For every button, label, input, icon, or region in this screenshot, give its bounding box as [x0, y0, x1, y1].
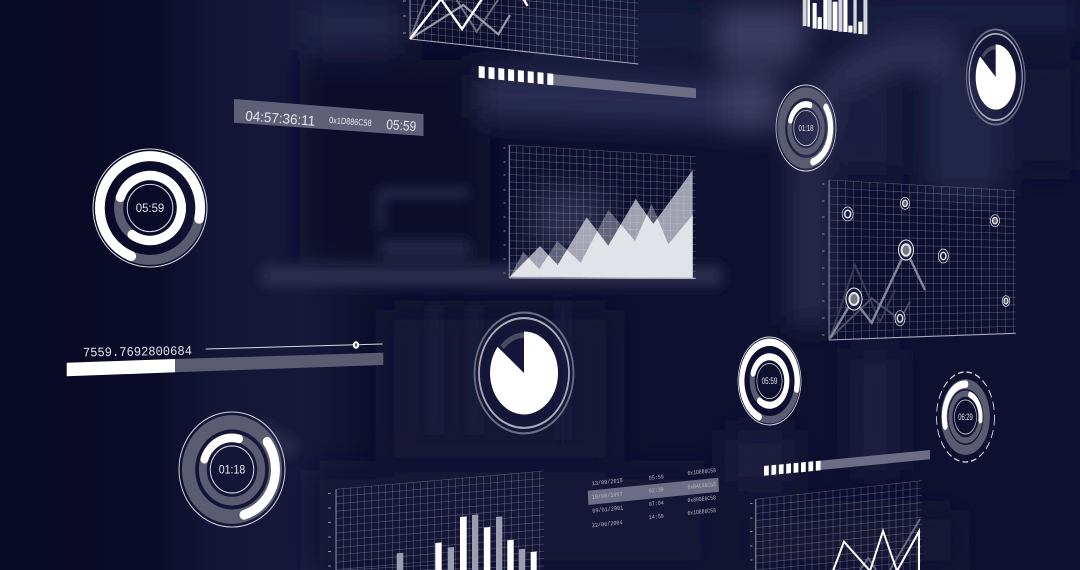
data table [588, 467, 719, 529]
data table: 0x84C46C58 [687, 481, 717, 491]
ring gauge: 06:29 with dashed outline [936, 372, 994, 462]
data table: 13/09/2015 [591, 477, 623, 487]
pie chart: centre [474, 313, 574, 433]
data table: 22/06/2004 [591, 519, 623, 529]
line chart: top centre [403, 0, 638, 64]
data table: 02:39 [648, 486, 664, 495]
ring gauge: 05:59 small [733, 331, 806, 431]
bar chart: top right strip [803, 0, 867, 34]
line chart: bottom right [750, 481, 922, 570]
ring gauge: 01:18 large: 01:18 [219, 464, 245, 477]
ring gauge: 01:18 small [772, 79, 840, 177]
pie chart: top right [966, 29, 1025, 125]
ring gauge: 05:59 large: 05:59 [136, 202, 164, 215]
data table: 14:59 [648, 513, 664, 521]
data table: 07:04 [648, 499, 664, 508]
ring gauge: 01:18 small: 01:18 [798, 123, 814, 133]
ring gauge: 01:18 large [171, 404, 293, 535]
data table: 18/08/1997 [591, 491, 623, 501]
chart markers [842, 197, 1010, 326]
timecode strip: 05:59 [386, 116, 417, 134]
numeric readout with slider: 7559.7692800684 [83, 344, 192, 360]
numeric readout with slider [67, 341, 383, 376]
timecode strip: 0x1D886C58 [329, 115, 372, 128]
data table: 0x1D886C58 [687, 467, 717, 477]
striped progress bar: bottom [764, 450, 930, 476]
ring gauge: 06:29 with dashed outline: 06:29 [958, 412, 973, 423]
data table: 0x1D886C58 [687, 507, 717, 517]
ring gauge: 05:59 large [85, 140, 215, 276]
data table: 0x800E6C58 [687, 494, 717, 504]
axis ticks [504, 148, 506, 273]
scatter and line chart: right [822, 180, 1016, 340]
striped progress bar: top [479, 66, 696, 98]
ring gauge: 05:59 small: 05:59 [762, 376, 777, 386]
bar chart: bottom left [328, 471, 544, 570]
data table: 09/01/2001 [592, 504, 624, 515]
area chart: centre [504, 145, 696, 278]
data table: 05:59 [648, 473, 664, 482]
timecode strip: 04:57:36:11 [245, 108, 316, 129]
timecode strip [234, 99, 424, 136]
